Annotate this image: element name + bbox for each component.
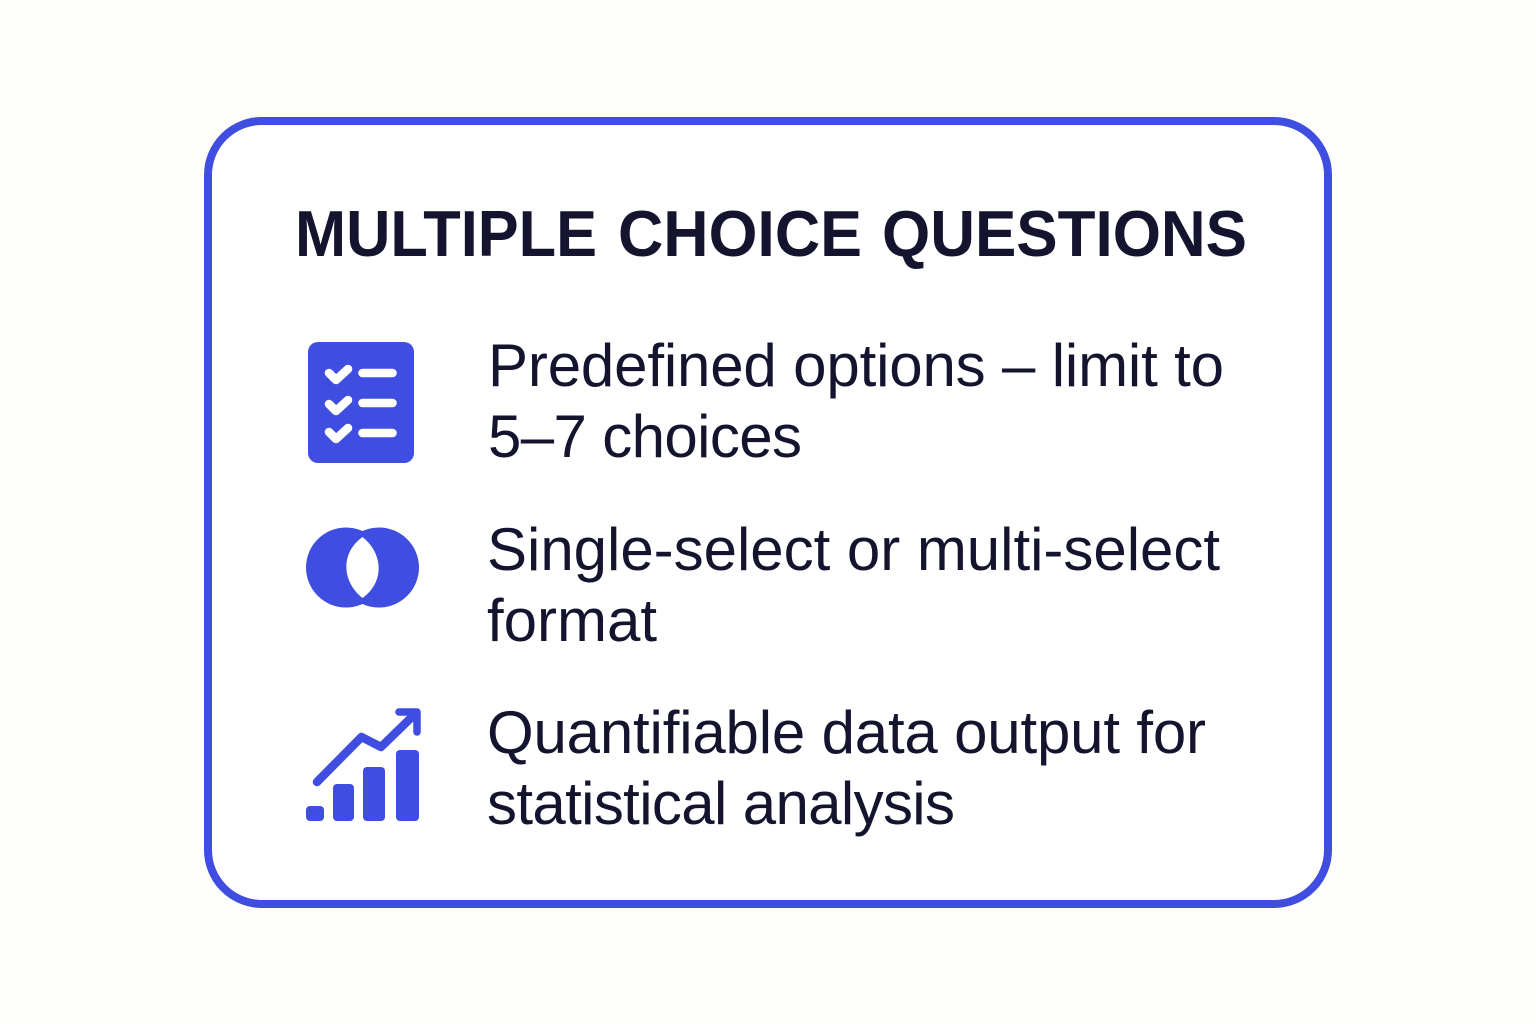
text: predefined options bbox=[488, 332, 1224, 470]
title bbox=[295, 197, 1247, 270]
text: predefined options: Predefined options – limit to bbox=[488, 332, 1224, 399]
text: predefined options: 5–7 choices bbox=[488, 403, 802, 470]
panel: multiple choice questions card bbox=[208, 121, 1328, 904]
text: single-select or multi-select bbox=[487, 516, 1220, 654]
title: MULTIPLE bbox=[295, 197, 597, 270]
title: QUESTIONS bbox=[882, 197, 1247, 270]
icon: rising bar chart with arrow bbox=[306, 712, 419, 821]
text: single-select or multi-select: format bbox=[487, 587, 657, 654]
text: quantifiable data output: Quantifiable data output for bbox=[487, 699, 1206, 766]
title: CHOICE bbox=[618, 197, 862, 270]
icon: checklist bbox=[308, 342, 414, 463]
text: quantifiable data output: statistical analysis bbox=[487, 770, 955, 837]
icon: overlapping circles bbox=[306, 528, 419, 608]
text: quantifiable data output bbox=[487, 699, 1206, 837]
text: single-select or multi-select: Single-select or multi-select bbox=[487, 516, 1220, 583]
